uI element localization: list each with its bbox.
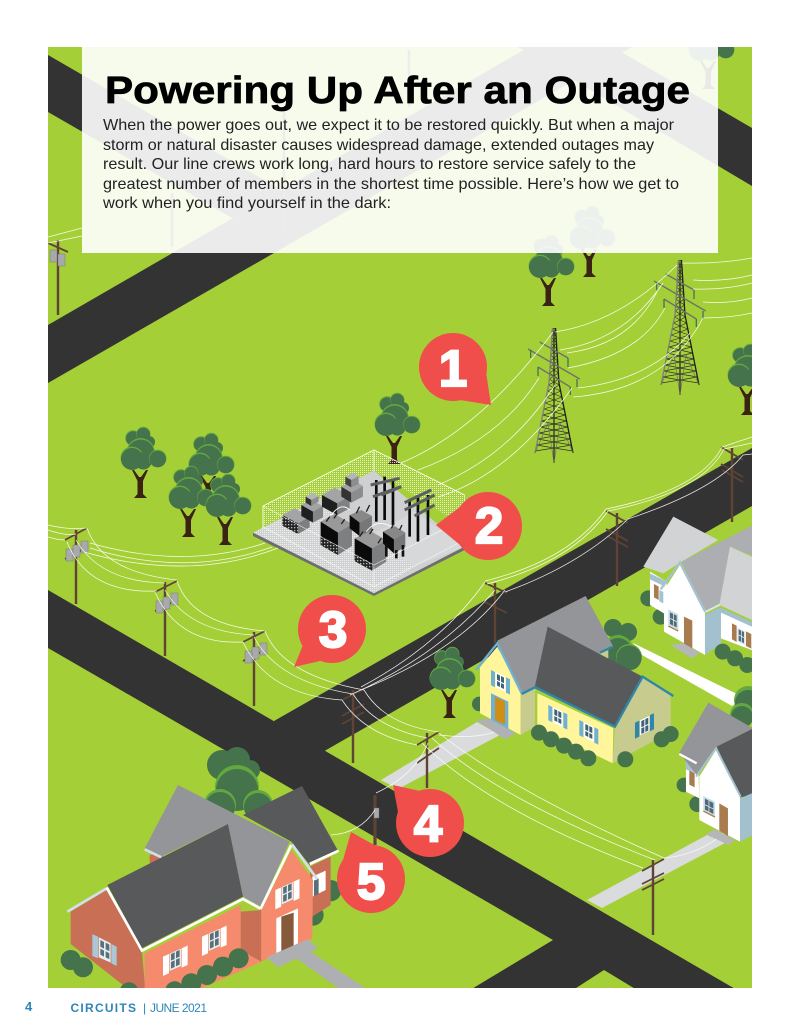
- road: upper left branch: [48, 55, 290, 218]
- driveway: yellow house: [381, 722, 500, 789]
- intro text: work when you find yourself in the dark:: [102, 195, 391, 212]
- yellow house: [472, 596, 679, 767]
- callout 4: [393, 785, 464, 857]
- publication name: CIRCUITS: [70, 1001, 136, 1015]
- road: upper diagonal: [48, 47, 632, 383]
- page number: 4: [25, 999, 33, 1014]
- substation equipment: [282, 473, 435, 571]
- upper white house: [640, 517, 755, 673]
- callout 2: 2: [475, 497, 503, 554]
- title: Powering Up After an Outage: [105, 70, 690, 112]
- road: main lower diagonal: [48, 590, 737, 990]
- bush at right edge: [730, 686, 752, 726]
- intro text: result. Our line crews work long, hard hours to restore service safely to the: [103, 156, 636, 173]
- intro text: When the power goes out, we expect it to be restored quickly. But when a major: [103, 117, 675, 134]
- callout 2: [436, 492, 522, 560]
- driveway: lower white house: [587, 835, 725, 908]
- intro text: greatest number of members in the shortest time possible. Here’s how we get to: [103, 176, 679, 193]
- bush behind yellow house: [603, 619, 642, 670]
- ghost poles under panel: [172, 50, 409, 247]
- lower white house: [677, 703, 753, 845]
- callout 1: [419, 333, 491, 405]
- transmission towers: [528, 260, 706, 463]
- driveway: upper white house: [633, 643, 743, 706]
- bush behind salmon house: [205, 747, 272, 814]
- intro text: storm or natural disaster causes widespread damage, extended outages may: [103, 137, 654, 154]
- separator: |: [143, 1001, 146, 1015]
- road: street toward upper right: [274, 448, 752, 765]
- intro text: [102, 117, 679, 212]
- callout 4: 4: [414, 795, 443, 852]
- callout 5: [337, 832, 405, 913]
- callout 3: [294, 595, 366, 667]
- distribution poles: [48, 240, 743, 935]
- trees: background groves: [120, 18, 774, 718]
- callout 5: 5: [357, 853, 385, 910]
- callout 3: 3: [319, 601, 347, 658]
- road: upper right branch: [518, 47, 752, 186]
- substation front fence: [263, 495, 465, 587]
- substation back fence: [263, 450, 465, 528]
- substation base: [253, 471, 465, 593]
- pole transformers: [50, 250, 379, 818]
- transmission wires: [401, 258, 752, 497]
- footer: [25, 999, 207, 1015]
- panel: introduction: [82, 47, 718, 253]
- callout 1: 1: [439, 340, 467, 397]
- distribution wires: [48, 228, 752, 868]
- date: JUNE 2021: [150, 1001, 207, 1015]
- driveway: salmon house: [296, 952, 365, 988]
- tree crown top right: [732, 48, 734, 54]
- salmon house: [61, 785, 341, 1001]
- substation: [253, 450, 465, 596]
